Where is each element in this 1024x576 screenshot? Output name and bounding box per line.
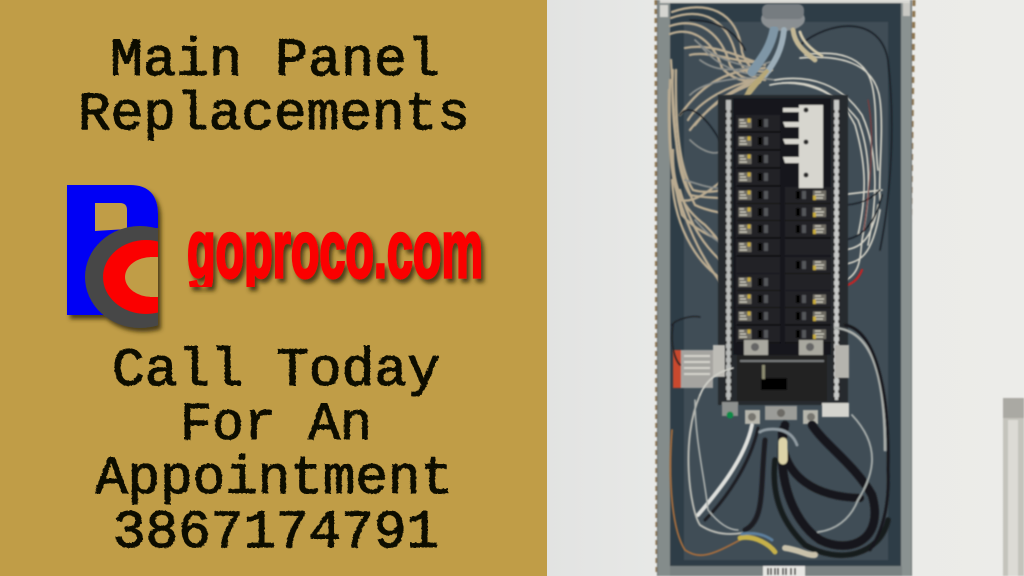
call to action text: For An — [180, 395, 372, 456]
neutral bars — [726, 100, 839, 400]
heading: Main Panel Replacements: Main Panel — [110, 31, 440, 92]
lower feeder cables — [671, 317, 888, 555]
stand at lower right — [1003, 398, 1024, 576]
service feed wires — [744, 30, 822, 100]
panel: gold text background — [0, 0, 547, 576]
heading: Main Panel Replacements: Replacements — [78, 85, 470, 146]
photo wall — [547, 0, 1024, 576]
photo: electrical panel on wall — [547, 0, 1024, 576]
call to action text: Call Today — [112, 341, 440, 402]
lugs — [722, 402, 849, 424]
call to action text: Appointment — [95, 449, 453, 510]
panel enclosure — [656, 0, 914, 576]
conduit connector at top — [761, 4, 805, 31]
breaker load center — [718, 95, 849, 424]
right breakers — [785, 187, 831, 343]
warning labels — [673, 345, 849, 388]
logo: PC monogram — [66, 185, 164, 336]
main breaker — [737, 340, 827, 401]
call to action text — [95, 341, 453, 564]
branch wiring — [669, 7, 892, 295]
heading: Main Panel Replacements — [78, 31, 470, 146]
white bus plate — [783, 105, 823, 188]
call to action text: 3867174791 — [113, 503, 439, 564]
logo text: goproco.com: goproco.com — [187, 204, 483, 295]
left breakers — [736, 115, 781, 343]
